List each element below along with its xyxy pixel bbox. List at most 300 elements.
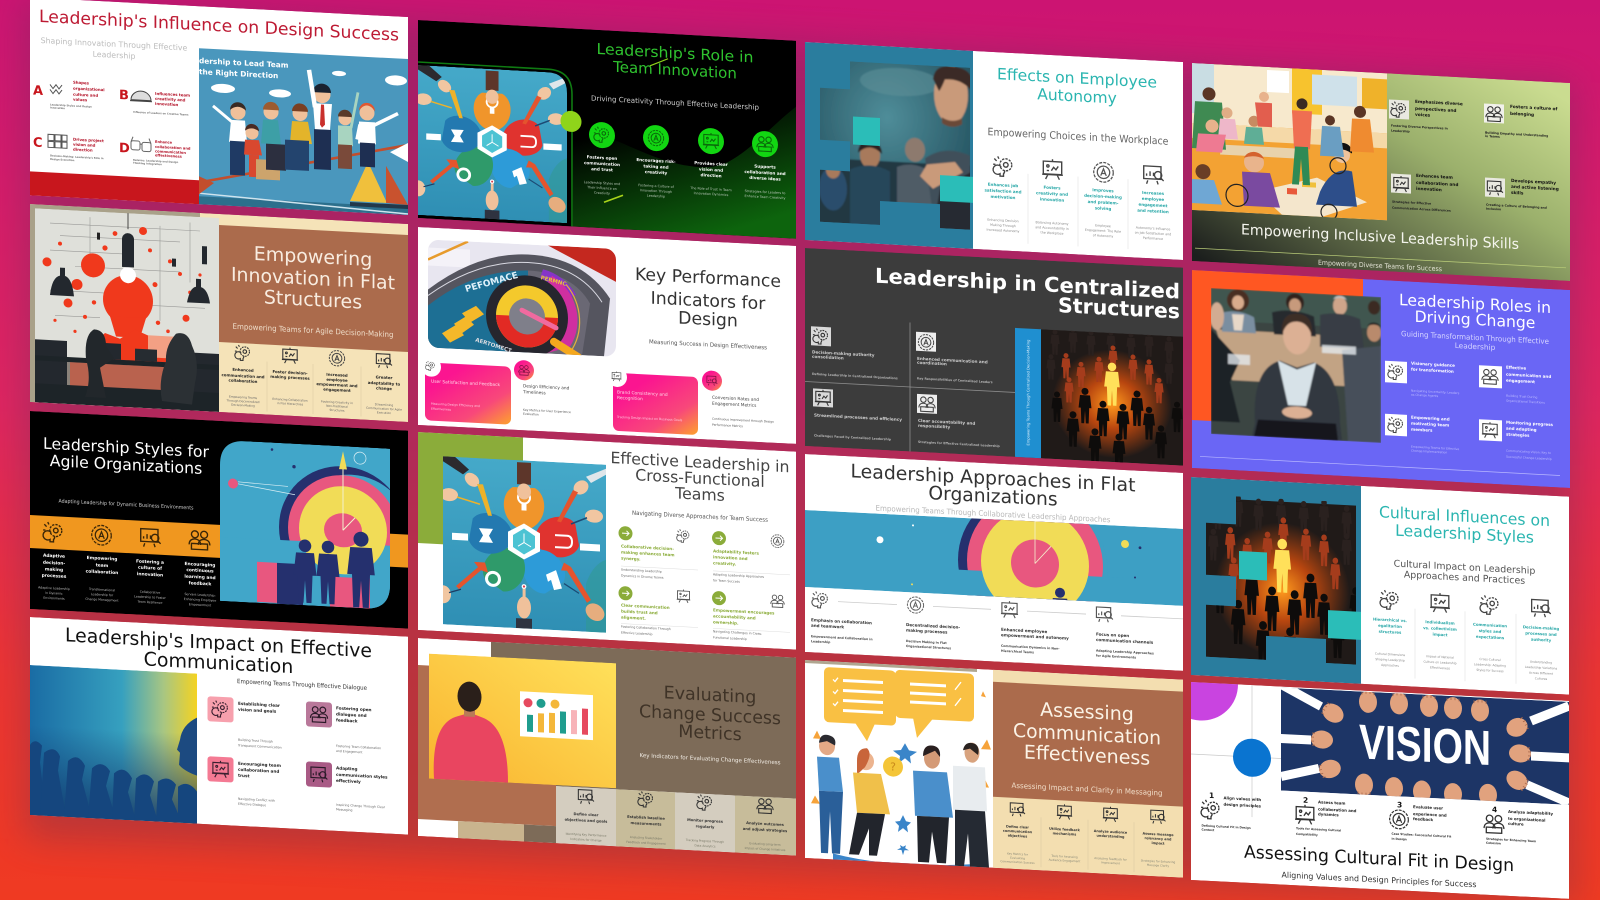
card 1: Measuring Design Efficiency and xyxy=(431,402,480,408)
item 3: Communication Across Differences xyxy=(1392,206,1451,213)
column 2: Audience Engagement xyxy=(1049,858,1081,863)
column 4: Streamlining xyxy=(375,402,393,407)
item 3: Empowering Teams for Effective xyxy=(1411,445,1459,451)
column 1: motivation xyxy=(991,194,1016,200)
card 2: Timeliness xyxy=(522,389,546,396)
column 2 xyxy=(85,525,119,603)
cell 4: Clear accountability and xyxy=(918,418,975,426)
image: people and speech bubbles xyxy=(811,665,991,869)
item 1: making enhances team xyxy=(621,550,675,557)
subtitle: Empowering Teams Through Collaborative Leadership Approaches xyxy=(876,504,1111,524)
column 2: Leadership for xyxy=(91,592,114,597)
column 4: and retention xyxy=(1137,208,1169,214)
column 3: decision-making xyxy=(1084,193,1122,200)
accent squares xyxy=(853,117,973,203)
column 1: Approaches xyxy=(1381,663,1399,668)
column 3: of Autonomy xyxy=(1093,233,1113,238)
item 2: communication and xyxy=(1506,372,1551,379)
list item B: creativity and xyxy=(155,96,186,102)
tile 1: objectives and goals xyxy=(565,818,608,824)
column 2: Leadership xyxy=(647,194,665,199)
column 3: Team Resilience xyxy=(137,600,162,605)
step 4: 4 xyxy=(1492,805,1497,814)
tile 1: Identifying Key Performance xyxy=(566,832,607,838)
list item C: vision and xyxy=(73,142,96,148)
column 2: Empowering xyxy=(87,555,117,563)
column 4: Assess message xyxy=(1142,832,1174,837)
column 3 xyxy=(134,528,167,605)
title panel xyxy=(219,225,408,352)
column 4: Cultures xyxy=(1535,676,1548,681)
image: performance dial xyxy=(428,240,616,362)
item 4: Adapting xyxy=(336,765,357,772)
title: Autonomy xyxy=(1037,85,1117,108)
slide: Evaluating Change Success Metrics xyxy=(418,638,796,856)
column 3: The Role of Trust in Team xyxy=(689,186,732,192)
tile 2: Establish baseline xyxy=(627,815,665,821)
step 3 xyxy=(1390,800,1452,844)
item 2: belonging xyxy=(1510,111,1534,118)
item 1: Navigating Uncertainty: Leaders xyxy=(1411,389,1460,395)
item 2: Fostering open xyxy=(336,705,372,712)
image: hands around a hub xyxy=(435,456,608,633)
column 2: in Flat Hierarchies xyxy=(277,401,304,406)
column 4: Decision-making xyxy=(1523,624,1559,631)
list item D: collaboration and xyxy=(155,145,191,151)
column 3: Improves xyxy=(1092,187,1114,193)
step 4: culture xyxy=(1508,821,1524,827)
image: crowd with glowing figure xyxy=(1202,493,1362,676)
cell 1: Decision-making authority xyxy=(812,349,875,358)
column 3 xyxy=(316,350,358,413)
card 1: Effectiveness xyxy=(431,407,451,412)
column 4: on Job Satisfaction and xyxy=(1135,230,1171,236)
item 3: collaboration and xyxy=(1416,180,1458,188)
column 1 xyxy=(38,522,70,601)
item 4: Successful Change Leadership xyxy=(1506,455,1552,461)
column 4 xyxy=(1141,810,1175,868)
title: Effective Leadership in xyxy=(611,448,790,476)
card 3: Recognition xyxy=(617,395,643,402)
column 2 xyxy=(1035,158,1069,236)
column 1: Adaptive Leadership xyxy=(38,585,70,591)
title panel xyxy=(993,682,1183,807)
column 4: change xyxy=(376,385,392,391)
title: Leadership Roles in xyxy=(1399,291,1551,317)
item 4: ownership. xyxy=(713,619,739,626)
column 3: vision and xyxy=(699,166,723,173)
column 1: Making Through xyxy=(990,223,1016,228)
item 1: Emphasizes diverse xyxy=(1415,99,1463,107)
column 4: Supports xyxy=(754,163,776,170)
item 1: Collaborative decision- xyxy=(621,544,674,551)
item 4 xyxy=(306,761,388,814)
column 2 xyxy=(636,124,676,199)
column 3: Improvement xyxy=(1101,860,1121,865)
column 4: feedback xyxy=(189,580,211,587)
title: Leadership's Influence on Design Success xyxy=(39,7,399,46)
list item D: communication xyxy=(155,149,186,155)
column 3: Collaborative xyxy=(140,590,160,595)
step 4 xyxy=(1484,805,1553,848)
column 3: expectations xyxy=(1476,634,1505,640)
title: Leadership's Role in xyxy=(597,40,754,66)
column 3: Provides clear xyxy=(694,160,729,167)
column 1: Evaluating xyxy=(1010,856,1025,860)
item 2: Adaptability fosters xyxy=(713,548,759,556)
subtitle: Empowering Diverse Teams for Success xyxy=(1318,259,1442,273)
column 1: communication xyxy=(584,160,620,167)
title: Structures xyxy=(1058,293,1180,323)
column 4: impact xyxy=(1151,841,1165,846)
column 4 xyxy=(1096,607,1154,660)
column 4: Execution xyxy=(377,410,391,415)
column 1: Decision-Making xyxy=(231,403,255,408)
card 2: Key Metrics for User Experience xyxy=(523,408,571,414)
decorative circles xyxy=(1162,643,1281,818)
step 4: to organizational xyxy=(1508,816,1545,823)
tile 3: regularly xyxy=(696,824,715,829)
column 1: in Dynamic xyxy=(45,591,63,596)
slide: Effective Leadership in Cross-Functional Teams xyxy=(418,432,796,650)
item 1: Establishing clear xyxy=(238,701,281,708)
column 1: decision- xyxy=(43,560,65,567)
step 3: feedback xyxy=(1413,816,1433,822)
list item A: Leadership Styles and Design xyxy=(50,102,92,109)
list item A xyxy=(33,80,104,110)
card 3 xyxy=(607,366,698,435)
step 3: Case Studies: Successful Cultural Fit xyxy=(1392,832,1452,839)
image: target banner xyxy=(805,480,1183,644)
column 4: Performance xyxy=(1143,236,1163,241)
list item A: Shapes xyxy=(73,80,90,85)
accent circle xyxy=(560,110,582,132)
column 2: collaboration xyxy=(86,568,118,576)
list item D: Balance: Leadership and Design xyxy=(133,158,178,164)
column 4: Understanding xyxy=(1530,660,1552,665)
column 2: vs. collectivism xyxy=(1423,625,1457,632)
title: Cultural Influences on xyxy=(1379,502,1550,530)
title: Effects on Employee xyxy=(997,65,1157,92)
cell 3 xyxy=(813,388,902,442)
column 4: communication channels xyxy=(1096,637,1154,645)
item 1: vision and goals xyxy=(238,707,277,714)
column 4: Autonomy's Influence xyxy=(1136,226,1170,231)
column 2: impact xyxy=(1433,632,1448,637)
column 4: Empowerment xyxy=(189,602,212,607)
step 3: in Design xyxy=(1392,837,1407,841)
image: team on a seesaw: dership to Lead Team xyxy=(199,56,289,70)
item 3: motivating team xyxy=(1411,421,1449,428)
column 1: Cultural Dimensions xyxy=(1375,652,1406,657)
item 2: feedback xyxy=(336,717,358,724)
item 3 xyxy=(208,756,282,808)
column 3: direction xyxy=(700,172,722,178)
column 3: Enhanced employee xyxy=(1001,627,1047,634)
card 2: Design Efficiency and xyxy=(523,383,570,392)
list item A: Innovation xyxy=(50,105,65,110)
column 3: Communication Dynamics in Non- xyxy=(1001,644,1060,651)
column 2: Transformational xyxy=(88,587,115,592)
title: Leadership's Impact on Effective xyxy=(65,624,372,662)
column 2: creativity xyxy=(645,169,668,175)
image: VISION with fists xyxy=(1281,684,1569,811)
column 1: Enhances job xyxy=(988,182,1018,188)
column 4: Adapting Leadership Approaches xyxy=(1096,649,1154,655)
column 1: Fosters open xyxy=(587,154,617,161)
column 4: continuous xyxy=(186,567,214,575)
item 1: synergy. xyxy=(621,556,641,562)
title: Change Success xyxy=(639,702,781,729)
item 3: Navigating Conflict with xyxy=(238,797,275,803)
item 2: Adapting Leadership Approaches xyxy=(713,572,764,579)
column 3: innovation xyxy=(137,571,163,579)
column 3: Increased xyxy=(326,372,348,378)
item 4: skills xyxy=(1511,190,1524,197)
column 3: styles and xyxy=(1479,628,1501,634)
item 2: for Team Success xyxy=(713,578,740,584)
column 2: Decentralized decision- xyxy=(906,622,960,630)
column 3: understanding xyxy=(1097,834,1125,839)
tile 2: Feedback and Engagement xyxy=(626,840,667,846)
title: Assessing Cultural Fit in Design xyxy=(1244,843,1514,876)
image: performance dial: AERTOMECT xyxy=(475,337,512,355)
item 2: innovation and xyxy=(713,554,748,561)
column 2: Balancing Autonomy xyxy=(1035,220,1069,226)
column 4: Encouraging xyxy=(185,561,215,569)
title panel: Structures xyxy=(264,286,362,314)
item 1: as Change Agents xyxy=(1411,393,1439,398)
column 3: employee xyxy=(326,377,348,383)
column 1: Their Influence on xyxy=(586,185,617,191)
column 2 xyxy=(906,596,960,651)
vertical banner: Empowering Teams Through Centralized Decision-Making xyxy=(1027,340,1030,446)
tile 4 xyxy=(735,795,796,856)
list item C: Design Execution xyxy=(50,157,75,162)
column 1: and trust xyxy=(591,166,613,172)
column 4: Strategies for Enhancing xyxy=(1141,858,1175,864)
slide: Cultural Influences on Leadership Styles xyxy=(1191,477,1569,695)
column 2: Impact of National xyxy=(1426,654,1454,660)
title: Empowering Inclusive Leadership Skills xyxy=(1241,222,1519,253)
image: business people pointing xyxy=(820,62,970,230)
column 4: learning and xyxy=(184,574,216,581)
column 3: Communication xyxy=(1473,622,1507,628)
tile 2: measurements xyxy=(631,821,662,827)
slide: Empowering Inclusive Leadership Skills xyxy=(1192,63,1570,281)
title: Team Innovation xyxy=(612,58,737,83)
column 2: taking and xyxy=(643,163,669,170)
item 1: Transparent Communication xyxy=(237,743,282,750)
title: Agile Organizations xyxy=(50,451,202,478)
item 3: builds trust and xyxy=(621,609,658,615)
card 3: Tracking Design Impact on Business Goals xyxy=(616,415,683,422)
title: Leadership Approaches in Flat xyxy=(851,461,1136,497)
title: Teams xyxy=(674,483,725,505)
item 3: Fostering Collaboration Through xyxy=(621,625,671,631)
slide: Leadership in Centralized Structures xyxy=(805,248,1183,472)
column 4 xyxy=(744,130,786,200)
cell 2 xyxy=(916,332,993,384)
list item D: Enhance xyxy=(155,140,173,145)
column 1: Empowerment and Collaboration in xyxy=(811,634,873,641)
item 4: Messaging xyxy=(336,807,352,812)
column 2: Enhancing Collaboration xyxy=(272,397,308,403)
item 2: Building Empathy and Understanding xyxy=(1485,131,1548,138)
tile 4: and adjust strategies xyxy=(743,827,788,833)
image: performance dial: PERMNC xyxy=(540,275,567,288)
slide: Leadership's Influence on Design Success xyxy=(30,0,408,215)
column 1 xyxy=(1000,802,1035,865)
list item A: culture and xyxy=(73,92,98,98)
column 1: Emphasis on collaboration xyxy=(811,617,872,625)
column 2: Fosters xyxy=(1043,185,1061,191)
item 1: for transformation xyxy=(1411,367,1454,374)
cell 2: Enhanced communication and xyxy=(917,356,988,365)
step 4: Cohesion xyxy=(1486,841,1501,845)
column 4 xyxy=(184,530,216,608)
card 3: Brand Consistency and xyxy=(617,389,668,398)
cell 1: Defining Leadership in Centralized Organizations xyxy=(812,372,898,380)
item 1: Understanding Leadership xyxy=(621,568,662,574)
item 4 xyxy=(1479,418,1554,461)
column 1: Increased Autonomy xyxy=(987,228,1020,233)
column 1: Enhanced xyxy=(232,367,254,373)
title panel: Effectiveness xyxy=(1024,741,1150,770)
column 1: processes xyxy=(42,573,67,580)
item 3 xyxy=(1391,172,1458,213)
column 2: creativity and xyxy=(1036,190,1068,197)
slide: Leadership Roles in Driving Change xyxy=(1192,270,1570,488)
item 2: Building Trust During xyxy=(1506,394,1538,399)
subtitle: Navigating Diverse Approaches for Team Success xyxy=(632,511,768,524)
column 2: Individualism xyxy=(1425,619,1455,626)
column 3: Leadership to Foster xyxy=(134,594,167,600)
column 3 xyxy=(1001,601,1069,656)
column 4: Focus on open xyxy=(1096,632,1129,638)
list item D: Thinking Integration xyxy=(133,161,162,166)
subtitle: Leadership xyxy=(93,50,135,61)
list item D xyxy=(120,136,190,166)
column 3: Leadership: Adapting xyxy=(1474,662,1506,668)
card 1 xyxy=(421,356,511,425)
image: performance dial: PEFOMACE xyxy=(464,271,520,295)
item 1 xyxy=(208,696,282,750)
title: Indicators for xyxy=(651,289,766,314)
title: Organizations xyxy=(928,483,1058,511)
title panel: Assessing Impact and Clarity in Messaging xyxy=(1012,781,1163,798)
cell 3: Streamlined processes and efficiency xyxy=(814,412,902,422)
column 1: Enhancing Decision xyxy=(987,218,1019,223)
title: Driving Change xyxy=(1415,308,1535,332)
step 2: dynamics xyxy=(1318,811,1339,817)
image: crowd with glowing figure xyxy=(1041,326,1183,472)
column 2: Effectiveness xyxy=(1430,665,1450,670)
slide: Effects on Employee Autonomy xyxy=(805,42,1183,260)
column 4: diverse ideas xyxy=(749,175,781,182)
image: team on a seesaw xyxy=(199,48,408,215)
slide: Leadership Approaches in Flat Organizations xyxy=(805,454,1183,671)
item 4: strategies xyxy=(1506,432,1530,438)
step 3: Evaluate user xyxy=(1413,804,1443,811)
column 4: Leadership Variations xyxy=(1525,665,1558,671)
column 1 xyxy=(1373,590,1408,668)
title: Cross-Functional xyxy=(635,465,765,491)
column 2: team xyxy=(96,562,109,569)
column 1: Environments xyxy=(43,596,65,601)
column 1: making xyxy=(45,566,63,573)
list item A: values xyxy=(73,97,88,102)
slide: Assessing Cultural Fit in Design xyxy=(1162,643,1569,899)
column 1: and teamwork xyxy=(811,623,844,629)
title panel: Innovation in Flat xyxy=(231,264,395,294)
column 3: Fostering a xyxy=(136,559,164,566)
item 4: Monitoring progress xyxy=(1506,420,1554,427)
column 2: Utilize feedback xyxy=(1049,827,1081,832)
list item C: Decision-Making: Leadership's Role in xyxy=(50,153,104,160)
column 1: Through Decentralized xyxy=(226,398,260,404)
item 4: and adapting xyxy=(1506,426,1537,432)
list item B: Influences team xyxy=(155,91,190,98)
column 2: making processes xyxy=(270,374,310,381)
card 4: Engagement Metrics xyxy=(712,401,757,409)
column 4: employee xyxy=(1142,196,1164,202)
column 4: Increases xyxy=(1142,190,1165,196)
column 3: culture of xyxy=(138,565,162,572)
column 3: empowerment and xyxy=(316,381,358,388)
tile 3: Data Analytics xyxy=(695,843,716,848)
item 1 xyxy=(1385,359,1460,399)
item 4: Creating a Culture of Belonging and xyxy=(1486,203,1547,210)
column 2: Foster decision- xyxy=(272,369,308,376)
column 1 xyxy=(221,344,265,408)
item 2: engagement xyxy=(1506,378,1535,384)
column 3: engagement xyxy=(323,387,351,393)
card 4: Continuous Improvement through Design xyxy=(712,417,774,424)
list item A: A xyxy=(33,84,43,99)
item 1: Visionary guidance xyxy=(1411,361,1455,368)
column 2: Organizational Structures xyxy=(906,644,951,650)
column 2 xyxy=(1423,592,1457,671)
item 2: Fostering Team Collaboration xyxy=(336,744,381,750)
item 2: creativity. xyxy=(713,560,737,567)
image: team on a seesaw: the Right Direction xyxy=(199,67,278,80)
step 2: collaboration and xyxy=(1318,806,1357,813)
column 4: relevancy and xyxy=(1145,836,1172,842)
title: Leadership in Centralized xyxy=(875,264,1180,303)
step 1 xyxy=(1201,791,1262,835)
item 2 xyxy=(1479,363,1551,405)
item 2: Effective xyxy=(1506,365,1526,371)
image: meeting room portrait xyxy=(1210,288,1381,443)
column 1: Define clear xyxy=(1006,824,1029,830)
item 4: Functional Leadership xyxy=(713,635,747,641)
title: Communication xyxy=(144,648,293,678)
column 2: Change Management xyxy=(85,597,119,603)
image: people and speech bubbles: ? xyxy=(890,760,896,774)
column 4: Servant Leadership: xyxy=(184,592,216,598)
column 1: Creativity xyxy=(594,191,610,196)
slide: Empowering Innovation in Flat Structures xyxy=(30,204,408,422)
column 1: objectives xyxy=(1008,834,1027,839)
item 4: Inspiring Change Through Clear xyxy=(336,803,386,809)
column 3: Hierarchical Teams xyxy=(1001,649,1034,654)
title: Key Performance xyxy=(635,265,781,292)
item 3: alignment. xyxy=(621,615,646,621)
item 3: members xyxy=(1411,427,1433,433)
card 4 xyxy=(702,370,774,430)
column 1: Leadership Styles and xyxy=(584,180,620,186)
